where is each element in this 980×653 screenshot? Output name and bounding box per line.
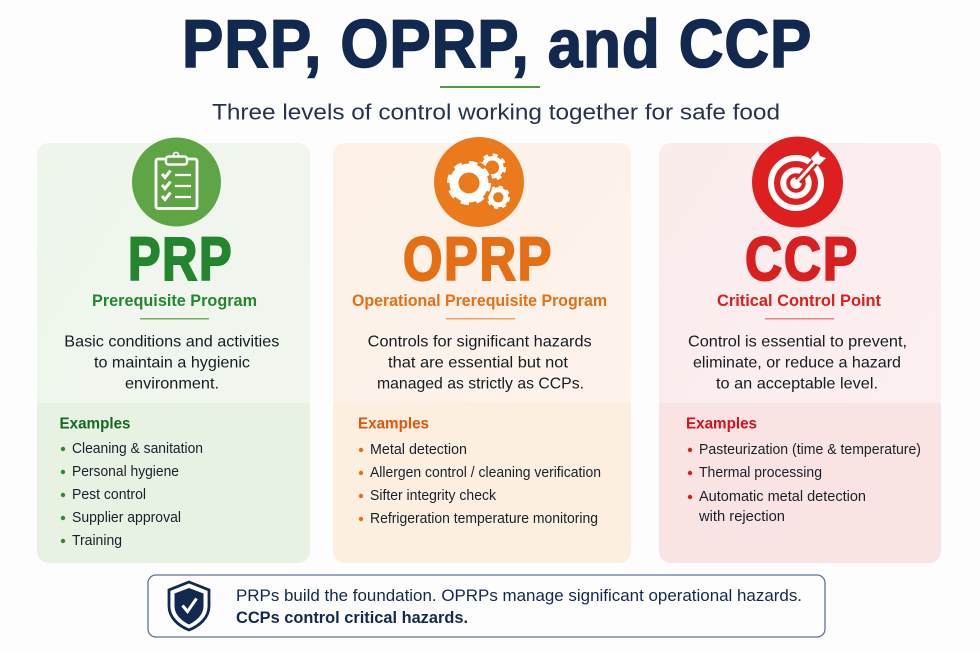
PRP description	[64, 334, 279, 392]
OPRP examples list: Refrigeration temperature monitoring	[370, 511, 598, 527]
CCP heading: CCP	[745, 225, 859, 293]
panel: OPRP	[333, 137, 631, 563]
card background	[333, 143, 631, 563]
OPRP description	[368, 334, 592, 392]
icon: gears	[434, 137, 524, 227]
PRP description: environment.	[125, 375, 219, 392]
CCP description	[688, 334, 907, 392]
CCP examples list	[688, 442, 921, 525]
examples background	[659, 403, 941, 563]
icon: target with arrow	[752, 136, 843, 228]
PRP examples list: Training	[72, 533, 122, 549]
CCP examples heading: Examples	[686, 416, 757, 432]
title: PRP, OPRP, and CCP	[182, 5, 812, 82]
PRP examples list: Supplier approval	[72, 510, 181, 526]
card background	[659, 143, 941, 563]
OPRP subheading: Operational Prerequisite Program	[352, 291, 607, 310]
CCP examples list: with rejection	[698, 509, 785, 525]
card background	[37, 143, 310, 563]
callout box	[148, 575, 825, 637]
OPRP examples list: Metal detection	[370, 442, 467, 458]
OPRP examples heading: Examples	[358, 416, 429, 432]
CCP examples list: Pasteurization (time & temperature)	[699, 442, 921, 458]
icon: shield with check	[169, 582, 209, 630]
OPRP examples list	[359, 442, 601, 527]
PRP subheading: Prerequisite Program	[92, 291, 257, 310]
PRP examples list: Cleaning & sanitation	[72, 441, 203, 457]
subtitle: Three levels of control working together for safe food	[212, 100, 780, 124]
OPRP examples list: Sifter integrity check	[370, 488, 497, 504]
PRP examples list	[61, 441, 203, 549]
OPRP description: Controls for significant hazards	[368, 334, 592, 351]
CCP description: to an acceptable level.	[716, 375, 878, 392]
CCP examples list: Thermal processing	[699, 465, 822, 481]
panel: CCP	[659, 136, 941, 563]
OPRP description: managed as strictly as CCPs.	[377, 375, 584, 392]
title underline	[440, 86, 540, 88]
examples background	[37, 403, 310, 563]
PRP heading: PRP	[128, 225, 233, 293]
PRP examples heading: Examples	[60, 416, 131, 432]
PRP examples list: Pest control	[72, 487, 146, 503]
CCP description: Control is essential to prevent,	[688, 334, 907, 351]
CCP subheading: Critical Control Point	[717, 291, 881, 310]
icon: clipboard checklist	[132, 138, 221, 226]
callout text	[236, 587, 802, 627]
CCP description: eliminate, or reduce a hazard	[693, 354, 901, 372]
OPRP heading: OPRP	[403, 225, 553, 293]
CCP examples list: Automatic metal detection	[699, 489, 866, 505]
callout: summary	[148, 575, 825, 637]
divider	[140, 318, 209, 320]
OPRP description: that are essential but not	[388, 354, 569, 372]
OPRP examples list: Allergen control / cleaning verification	[370, 465, 601, 481]
PRP examples list: Personal hygiene	[72, 464, 179, 480]
PRP description: Basic conditions and activities	[64, 334, 279, 351]
divider	[765, 318, 834, 320]
panel: PRP	[37, 138, 310, 563]
examples background	[333, 403, 631, 563]
callout text: CCPs control critical hazards.	[236, 609, 468, 627]
divider	[446, 318, 515, 320]
PRP description: to maintain a hygienic	[94, 354, 250, 372]
callout text: PRPs build the foundation. OPRPs manage significant operational hazards.	[236, 587, 802, 605]
